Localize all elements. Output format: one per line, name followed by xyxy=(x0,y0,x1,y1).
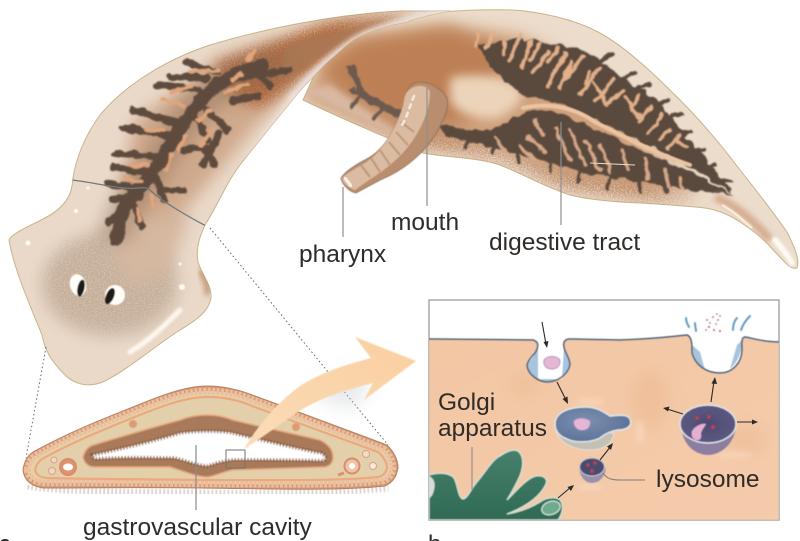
rear darker left trunk xyxy=(346,64,402,122)
detail square xyxy=(226,450,245,468)
label line: Golgi apparatus xyxy=(471,447,473,490)
digesting vacuole with enzymes xyxy=(680,405,736,455)
released waste particles xyxy=(686,313,750,332)
arrows in the cell xyxy=(542,322,758,498)
panel backdrop xyxy=(429,300,779,520)
pale central line of the tract xyxy=(523,106,690,165)
label: digestive tract: digestive tract xyxy=(489,229,640,256)
cross-section of the body xyxy=(23,386,398,510)
label line: pharynx xyxy=(342,187,344,237)
endocytosis pit lining xyxy=(527,349,570,382)
label: Golgi apparatus: apparatus xyxy=(438,415,547,442)
cilia fringe xyxy=(28,486,388,493)
tail shading and highlights xyxy=(715,197,770,240)
rear half of the body xyxy=(300,10,798,268)
left organs xyxy=(48,457,76,475)
icon: right eye xyxy=(103,285,125,305)
cell beading xyxy=(27,391,393,484)
pharynx xyxy=(341,82,448,193)
inner muscle line xyxy=(35,397,387,480)
lilac highlight along the fold xyxy=(290,11,450,102)
label line: digestive tract xyxy=(560,122,562,225)
big arrow from cross-section to cell detail xyxy=(244,337,416,449)
lysosome vesicle xyxy=(579,458,606,483)
highlight on the lower head edge xyxy=(130,310,180,352)
digestive tract branches, front xyxy=(107,50,290,243)
cell cytoplasm xyxy=(429,335,779,520)
cell membrane xyxy=(429,335,779,382)
icon: food particle entering xyxy=(544,356,560,369)
dotted line: left edge of cross-section projection xyxy=(26,347,46,458)
head shading xyxy=(42,233,178,337)
mid body shading xyxy=(114,16,374,220)
digestive tract branches, rear upper xyxy=(476,34,733,193)
cut line across the body xyxy=(72,180,208,227)
cytoplasm shading xyxy=(636,376,759,450)
label line: mouth xyxy=(426,88,428,206)
gastrovascular cavity lining xyxy=(83,415,333,477)
label line: lysosome xyxy=(603,473,645,480)
label: lysosome: lysosome xyxy=(656,466,759,493)
label line: gastrovascular cavity xyxy=(195,445,197,510)
dotted line: right edge of cross-section projection xyxy=(210,228,388,445)
Golgi apparatus xyxy=(429,450,562,520)
food vacuole xyxy=(555,407,631,450)
soft halo around the branches xyxy=(115,65,285,240)
big arrow shadow xyxy=(310,372,370,410)
label: gastrovascular cavity: gastrovascular cavity xyxy=(83,514,313,541)
label: pharynx: pharynx xyxy=(299,241,386,268)
label: mouth: mouth xyxy=(391,209,459,236)
panel: cell detail xyxy=(429,300,779,520)
front half of the body xyxy=(9,11,450,385)
cavity interior xyxy=(92,431,326,466)
digestive tract branches, rear lower xyxy=(440,110,735,195)
icon: left eye xyxy=(67,272,89,298)
label: Golgi apparatus: Golgi xyxy=(438,389,495,416)
outer epidermis xyxy=(23,386,398,489)
exocytosis pit lining xyxy=(692,340,742,370)
flatworm body xyxy=(9,10,798,385)
right organs xyxy=(338,450,376,475)
nerve cords xyxy=(129,420,300,431)
